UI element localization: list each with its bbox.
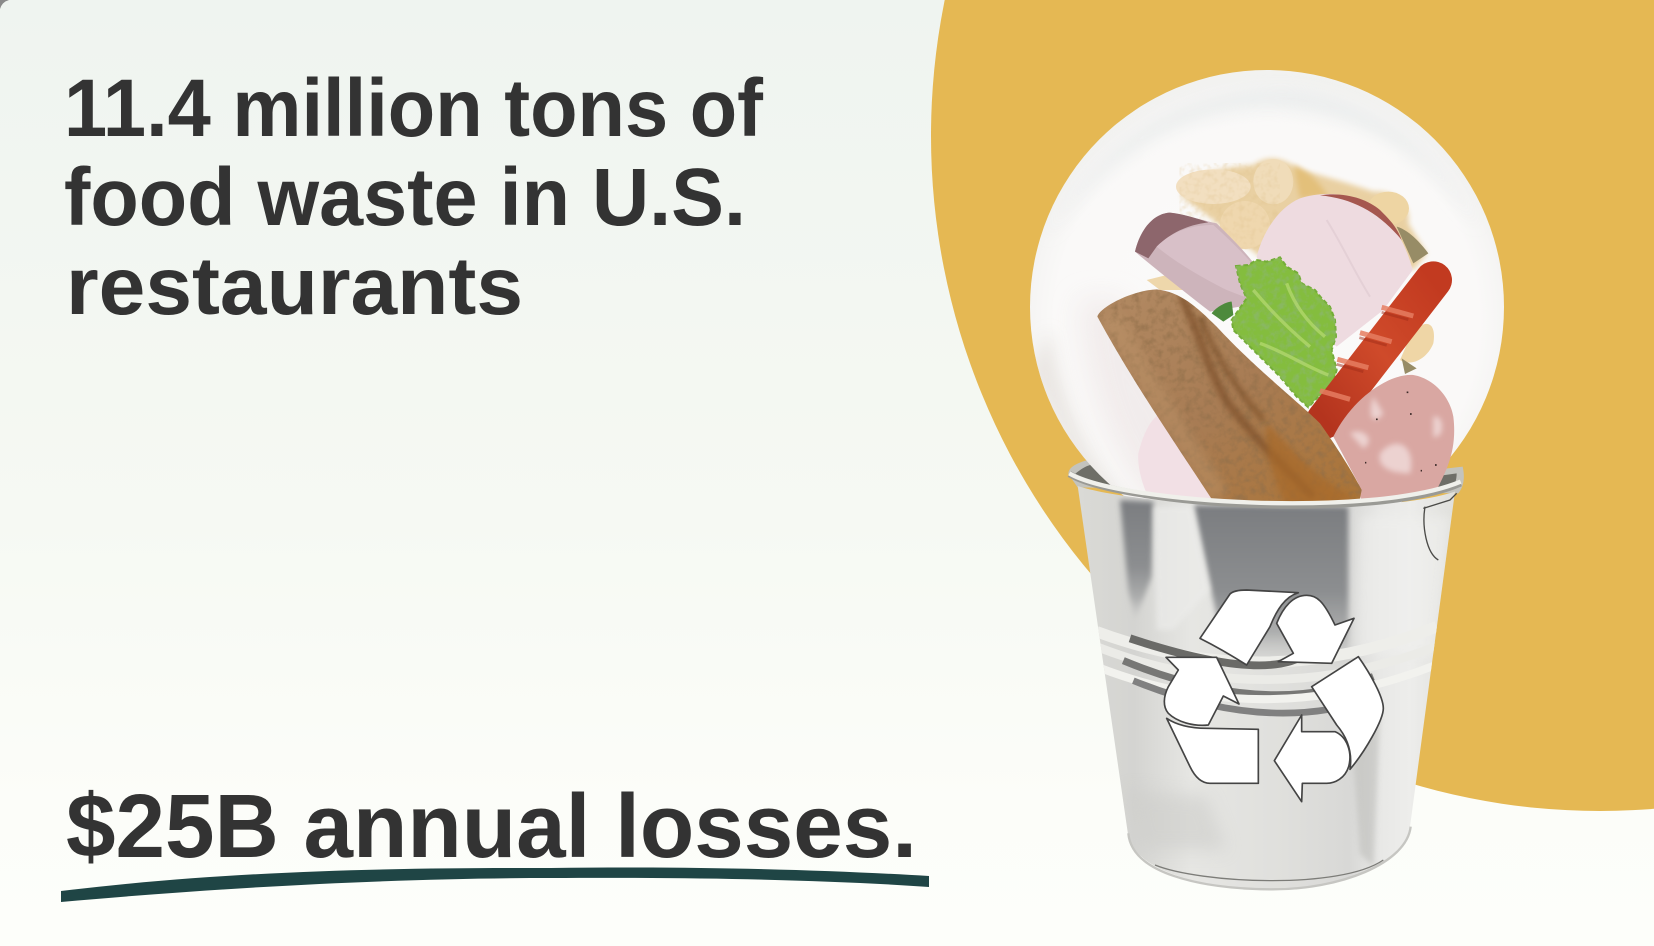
bucket grooves xyxy=(1097,627,1440,713)
bucket base ring xyxy=(1155,860,1383,881)
underline stroke xyxy=(61,867,929,902)
large ham slice xyxy=(1257,194,1413,347)
rolled ham slice xyxy=(1135,213,1255,312)
callout: annual losses: $25B annual losses. xyxy=(66,777,917,877)
recycling symbol xyxy=(1164,590,1383,802)
top-left rounded corner xyxy=(0,0,9,9)
lettuce xyxy=(1212,257,1340,410)
bucket back rim xyxy=(1068,459,1464,493)
heading: food waste statistic xyxy=(64,63,764,332)
bucket handle seam xyxy=(1423,493,1457,560)
bucket front rim xyxy=(1069,474,1461,506)
food scraps on plate xyxy=(1093,159,1454,510)
plate xyxy=(1030,70,1504,544)
sausage xyxy=(1320,280,1433,420)
heading: food waste statistic: food waste in U.S. xyxy=(64,152,746,243)
metal bucket xyxy=(1069,473,1461,889)
pink ham slice lower left xyxy=(1138,413,1233,502)
bucket base edge xyxy=(1128,827,1411,889)
heading: food waste statistic: 11.4 million tons of xyxy=(64,63,764,154)
yellow circle backdrop xyxy=(931,0,1654,811)
mortadella slice xyxy=(1333,375,1454,505)
heading: food waste statistic: restaurants xyxy=(66,241,523,332)
bread xyxy=(1093,287,1367,510)
sauce and crumbs xyxy=(1147,159,1434,374)
bucket reflections xyxy=(1097,500,1450,881)
bucket body xyxy=(1078,486,1455,889)
illustration: bucket of food waste xyxy=(1030,70,1504,889)
